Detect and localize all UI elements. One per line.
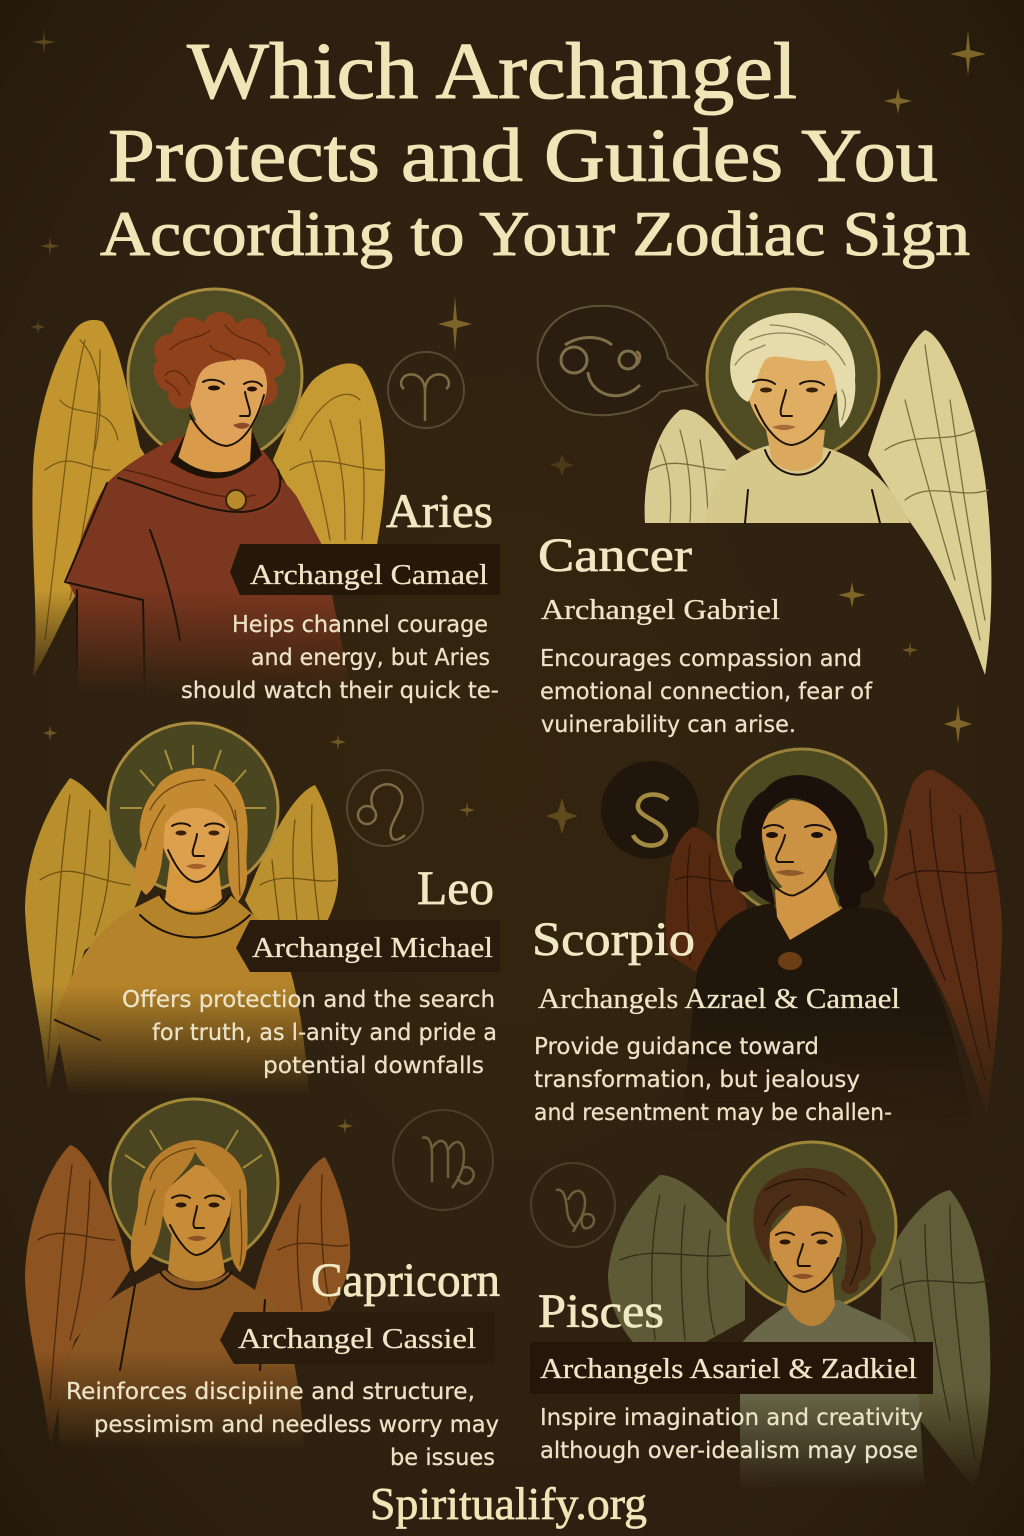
description (66, 1379, 499, 1471)
description: vuinerability can arise. (541, 712, 796, 738)
icon: Capricorn zodiac symbol (393, 1110, 493, 1210)
title: According to Your Zodiac Sign (100, 198, 970, 269)
name band (230, 544, 500, 595)
description (122, 987, 497, 1079)
heading: Scorpio: Scorpio (532, 913, 695, 966)
heading: Leo: Leo (417, 862, 494, 915)
description: be issues (390, 1445, 495, 1471)
archangel name: Archangel Cassiel (238, 1323, 476, 1355)
description: and energy, but Aries (251, 645, 490, 671)
description (540, 646, 873, 738)
description: Inspire imagination and creativity (540, 1405, 923, 1431)
description: potential downfalls (263, 1053, 484, 1079)
icon: Aries zodiac symbol (388, 352, 464, 428)
decorative stars (31, 30, 986, 1134)
panel: Leo (25, 722, 500, 1100)
description: pessimism and needless worry may (94, 1412, 499, 1438)
icon: Cancer zodiac symbol (538, 306, 697, 415)
title (100, 28, 970, 269)
illustration: Leo angel (25, 722, 338, 1100)
icon: Pisces zodiac symbol (531, 1163, 615, 1247)
icon: Scorpio zodiac symbol (601, 761, 699, 859)
description (534, 1034, 892, 1126)
archangel name: Archangels Azrael & Camael (538, 983, 900, 1015)
title: Which Archangel (187, 28, 797, 116)
title: Protects and Guides You (108, 114, 938, 198)
description (540, 1405, 923, 1464)
panel: Cancer (538, 288, 991, 738)
name band (236, 920, 500, 972)
description (181, 612, 499, 704)
hair back (155, 352, 285, 409)
illustration: Capricorn angel (25, 1098, 350, 1460)
archangel name: Archangel Michael (252, 932, 493, 964)
panel: Scorpio (532, 748, 1002, 1140)
illustration: Cancer angel (645, 288, 991, 675)
heading: Cancer: Cancer (538, 529, 692, 582)
description: Heips channel courage (232, 612, 488, 638)
archangel name: Archangel Camael (250, 559, 488, 591)
heading: Capricorn: Capricorn (311, 1254, 500, 1307)
panel: Pisces (530, 1141, 990, 1490)
name band (220, 1312, 495, 1364)
heading: Aries: Aries (386, 485, 493, 538)
name band (530, 1342, 933, 1394)
description: Encourages compassion and (540, 646, 862, 672)
description: although over-idealism may pose (540, 1438, 918, 1464)
illustration: Aries angel (32, 288, 385, 700)
archangel name: Archangel Gabriel (541, 594, 780, 626)
description: transformation, but jealousy (534, 1067, 860, 1093)
description: should watch their quick te- (181, 678, 499, 704)
archangel name: Archangels Asariel & Zadkiel (540, 1353, 917, 1385)
illustration: Scorpio angel (666, 748, 1002, 1140)
description: Reinforces discipiine and structure, (66, 1379, 475, 1405)
description: emotional connection, fear of (540, 679, 873, 705)
icon: Leo zodiac symbol (347, 770, 423, 846)
description: for truth, as l-anity and pride a (152, 1020, 497, 1046)
footer: site name: Spiritualify.org (370, 1478, 647, 1529)
panel: Capricorn (25, 1098, 500, 1471)
description: Offers protection and the search (122, 987, 495, 1013)
heading: Pisces: Pisces (538, 1285, 664, 1338)
description: Provide guidance toward (534, 1034, 819, 1060)
illustration: Pisces angel (608, 1141, 990, 1490)
panel: Aries (32, 288, 500, 704)
description: and resentment may be challen- (534, 1100, 892, 1126)
